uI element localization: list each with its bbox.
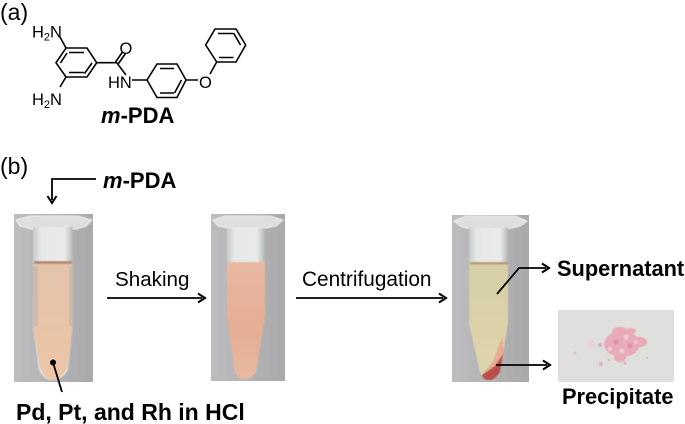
atom labels: H <box>32 91 44 109</box>
arrow: precipitate <box>496 360 550 370</box>
panel label (b): (b) <box>0 153 28 179</box>
arrow: supernatant <box>497 264 549 294</box>
atom labels: H <box>32 24 44 42</box>
atom labels: N <box>50 91 62 109</box>
atom labels: HN <box>108 74 132 92</box>
arrow: m-PDA added to tube <box>48 179 96 203</box>
atom labels: 2 <box>44 99 50 111</box>
label: Centrifugation: Centrifugation <box>302 268 431 291</box>
tube 1: Pd, Pt, Rh solution <box>14 214 93 382</box>
compound name m-PDA: m-PDA <box>101 103 174 128</box>
atom labels: N <box>50 24 62 42</box>
atom labels <box>32 24 212 111</box>
atom labels: O <box>199 74 212 92</box>
atom labels: O <box>120 40 132 58</box>
label: Precipitate: Precipitate <box>562 384 673 409</box>
arrow: shaking <box>107 294 205 302</box>
tube 2: after shaking <box>211 214 285 381</box>
tube 3: after centrifugation <box>452 215 529 382</box>
atom labels: 2 <box>44 32 50 44</box>
label: Supernatant: Supernatant <box>557 256 684 281</box>
leader line to solution <box>50 360 62 392</box>
chemical structure of m-PDA <box>56 29 246 98</box>
label: Shaking: Shaking <box>115 268 189 291</box>
photo: precipitate powder <box>558 310 674 382</box>
m-PDA addition label: m-PDA <box>103 168 176 193</box>
arrow: centrifugation <box>296 294 446 302</box>
